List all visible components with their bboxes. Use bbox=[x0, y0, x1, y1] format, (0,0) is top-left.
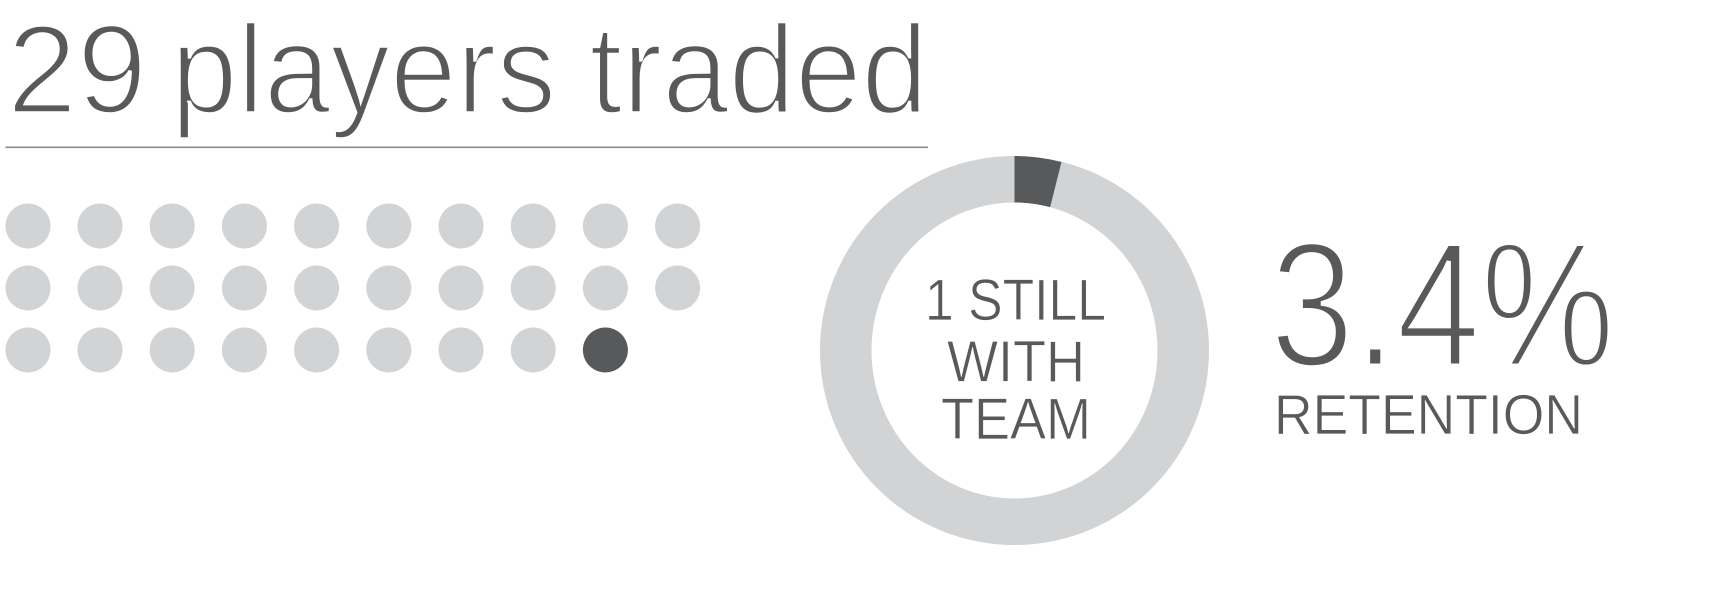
donut centre label bbox=[925, 268, 1106, 452]
donut centre label: 1 STILL bbox=[925, 268, 1106, 333]
title: players traded bbox=[171, 0, 928, 140]
donut centre label: WITH bbox=[947, 330, 1085, 394]
title underline bbox=[6, 146, 928, 148]
retention percentage: 3.4% bbox=[1270, 205, 1615, 404]
title: 29 bbox=[7, 0, 147, 140]
donut chart: 3.4% retained bbox=[820, 156, 1209, 545]
retention label: RETENTION bbox=[1274, 383, 1583, 447]
dot grid: 29 players, 1 retained bbox=[6, 204, 700, 372]
donut centre label: TEAM bbox=[941, 387, 1091, 452]
